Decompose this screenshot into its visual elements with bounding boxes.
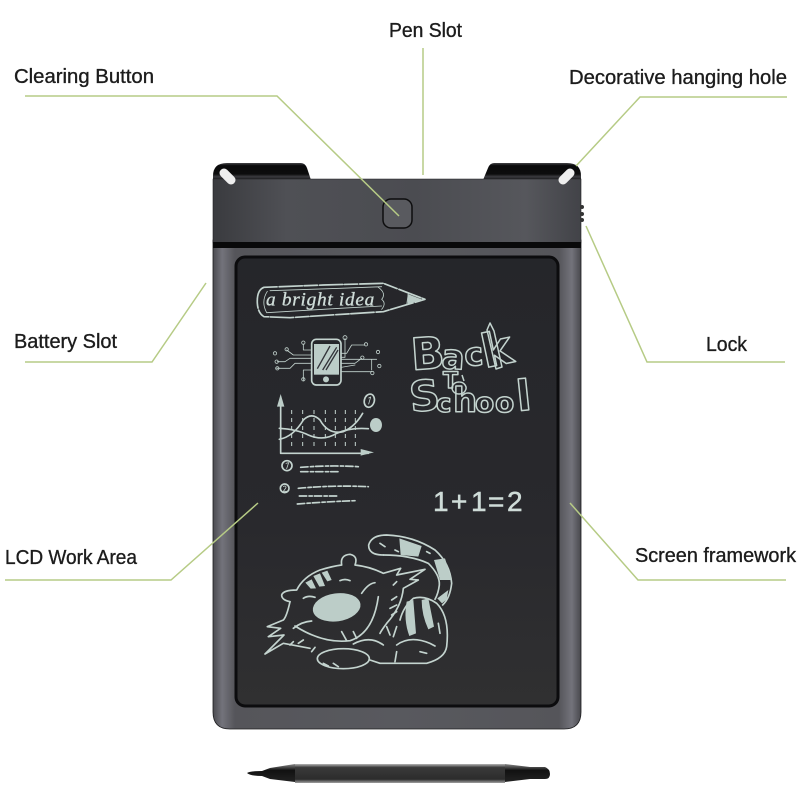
Back to School lettering: c <box>436 389 451 419</box>
doodles top <box>257 283 425 504</box>
tablet <box>213 163 584 729</box>
label: lock: Lock <box>706 334 748 356</box>
Back to School lettering: T <box>443 369 458 394</box>
Back to School lettering: h <box>453 381 477 421</box>
phone circuit doodle <box>273 336 381 385</box>
Back to School lettering: a <box>440 337 466 379</box>
cat doodle <box>265 535 452 669</box>
line chart doodle <box>277 393 382 456</box>
Back to School lettering: o <box>495 386 514 419</box>
LCD screen <box>236 257 558 706</box>
Back to School lettering: o <box>475 386 494 419</box>
Back to School lettering <box>407 319 533 422</box>
leader: pen slot <box>422 48 424 175</box>
leader: LCD work area <box>5 503 258 580</box>
leader: screen framework <box>570 503 786 580</box>
pencil doodle: a bright idea <box>266 289 374 310</box>
leader: clearing button <box>25 96 399 216</box>
label: pen slot: Pen Slot <box>389 20 462 42</box>
Back to School lettering: S <box>407 370 442 422</box>
tablet body frame <box>213 240 581 729</box>
label: LCD work area: LCD Work Area <box>5 547 138 569</box>
label: clearing button: Clearing Button <box>14 66 154 88</box>
Back to School lettering: k <box>476 319 519 379</box>
Back to School lettering: B <box>409 328 446 381</box>
hanging tabs <box>213 163 581 185</box>
pencil doodle <box>257 283 425 318</box>
top bar <box>213 179 581 243</box>
bar shadow strip <box>213 242 581 248</box>
label: decorative hanging hole: Decorative hanging hole <box>569 67 787 89</box>
leader: decorative hanging hole <box>576 97 787 166</box>
sum doodle: 1+1=2 <box>433 486 523 517</box>
leader: battery slot <box>25 283 206 362</box>
leader: lock <box>586 226 785 362</box>
apple and pencil accents <box>452 323 502 394</box>
clearing button <box>383 199 412 228</box>
chart notes doodle <box>280 461 368 504</box>
Back to School lettering: l <box>514 371 533 421</box>
label: battery slot: Battery Slot <box>14 331 117 353</box>
stylus pen <box>247 764 550 783</box>
hole: right <box>563 173 570 180</box>
side lock <box>580 205 584 222</box>
Back to School lettering: c <box>463 335 484 374</box>
label: screen framework: Screen framework <box>635 545 797 567</box>
hole: left <box>224 173 231 180</box>
